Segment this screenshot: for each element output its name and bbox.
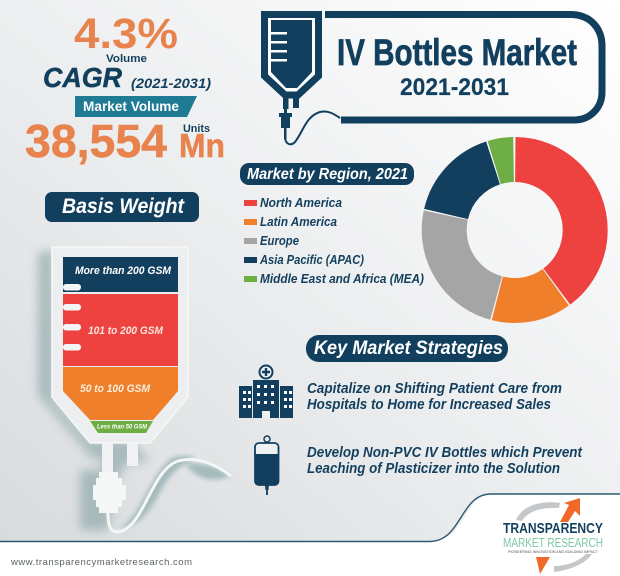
- bag shadow: [38, 250, 150, 530]
- CAGR value: 4.3%: [74, 10, 178, 58]
- donut chart: market by region: [444, 160, 585, 300]
- heading: basis weight: [45, 192, 199, 222]
- units label: Units: [183, 123, 210, 135]
- strategy text 1: Hospitals to Home for Increased Sales: [307, 397, 551, 413]
- segment: less than 50 GSM: Less than 50 GSM: [97, 424, 148, 430]
- volume label: Volume: [106, 53, 147, 65]
- bag connector: [93, 472, 126, 513]
- title years: 2021-2031: [400, 74, 509, 101]
- heading: basis weight: Basis Weight: [62, 195, 185, 218]
- segment: 101 to 200 GSM: [63, 294, 178, 366]
- legend item: Europe: [244, 233, 299, 248]
- legend item: Europe: Europe: [260, 233, 299, 248]
- legend item: North America: North America: [260, 195, 342, 210]
- logo tagline: PIONEERING INNOVATION AND BUILDING IMPACT: [508, 549, 599, 554]
- heading: key market strategies: Key Market Strategies: [314, 338, 503, 359]
- footer curve line: [0, 494, 620, 542]
- segment: less than 50 GSM: [90, 421, 153, 433]
- strategy text 1: [307, 381, 562, 413]
- segment: 50 to 100 GSM: [63, 367, 178, 420]
- icon: IV bag: [255, 436, 278, 495]
- market volume banner: Market Volume: [83, 98, 179, 114]
- strategy text 2: Develop Non-PVC IV Bottles which Prevent: [307, 445, 583, 461]
- segment: 50 to 100 GSM: 50 to 100 GSM: [80, 383, 151, 395]
- logo lower arc: [554, 554, 592, 572]
- bag illustration: basis weight chart: [38, 247, 231, 532]
- segment: more than 200 GSM: More than 200 GSM: [75, 265, 172, 277]
- strategy text 2: [307, 445, 583, 477]
- icon: hospital: [239, 366, 293, 418]
- website url: www.transparencymarketresearch.com: [10, 557, 192, 568]
- tube shadow: [120, 456, 230, 528]
- legend: regions: [244, 195, 424, 286]
- bag tube: [108, 459, 231, 532]
- heading: market by region: Market by Region, 2021: [247, 166, 408, 183]
- segment: more than 200 GSM: [63, 257, 178, 292]
- icon: title IV bag: [264, 14, 340, 144]
- legend item: Latin America: Latin America: [260, 214, 337, 229]
- legend item: Middle East and Africa: Middle East and Africa (MEA): [260, 271, 424, 286]
- bag scale ticks: [63, 284, 81, 350]
- legend item: Asia Pacific: Asia Pacific (APAC): [259, 252, 364, 267]
- CAGR period: (2021-2031): [131, 75, 211, 91]
- market volume unit: Mn: [179, 127, 225, 164]
- title frame: [325, 14, 602, 120]
- CAGR label: CAGR: [43, 62, 123, 93]
- logo up arrow: [560, 498, 580, 522]
- segment: 101 to 200 GSM: 101 to 200 GSM: [88, 325, 164, 337]
- market volume banner: [75, 96, 197, 117]
- bag ports: [102, 443, 138, 473]
- strategy text 1: Capitalize on Shifting Patient Care from: [307, 381, 562, 397]
- logo: Transparency Market Research: [503, 498, 603, 574]
- logo down arrow: [536, 557, 550, 574]
- logo upper arc: [516, 502, 560, 521]
- strategy text 2: Leaching of Plasticizer into the Solution: [307, 461, 560, 477]
- bag body: [52, 247, 188, 443]
- market volume value: 38,554: [25, 115, 167, 167]
